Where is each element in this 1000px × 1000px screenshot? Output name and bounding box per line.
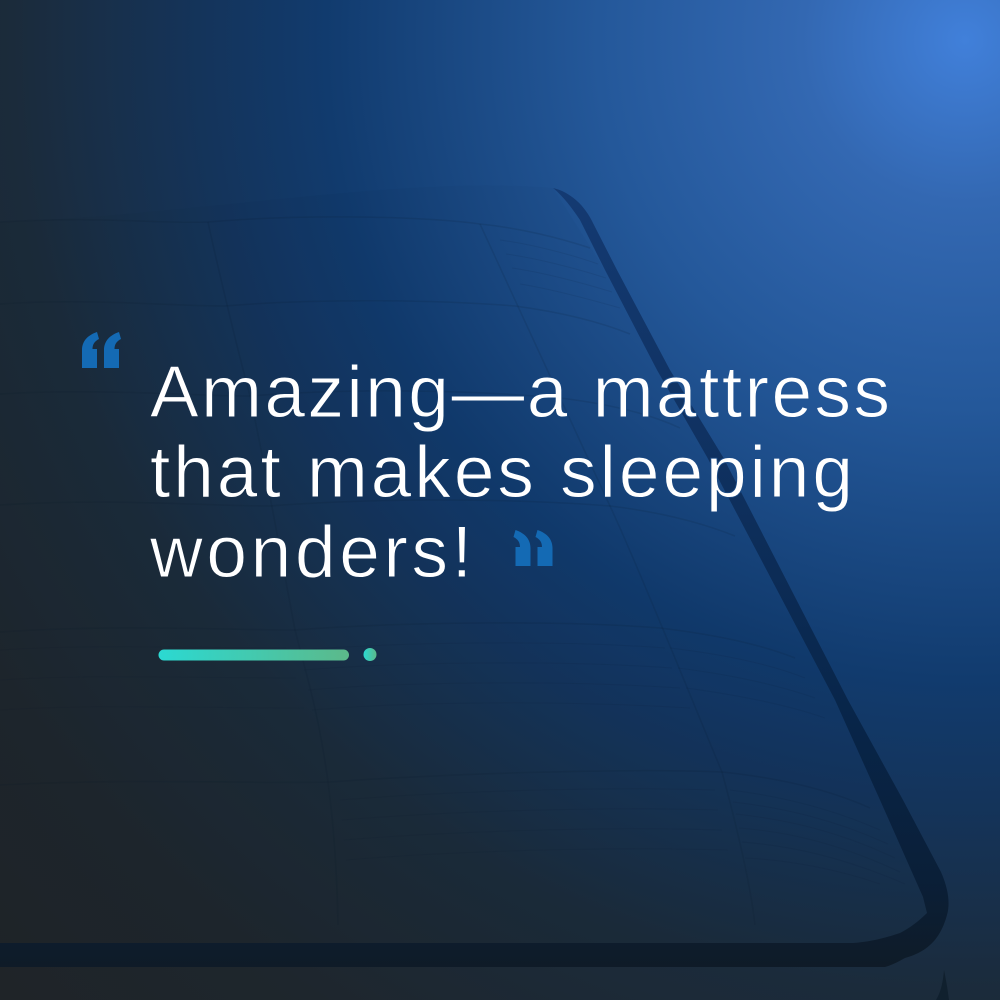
mattress tuft seams <box>0 217 870 925</box>
accent dot <box>364 648 376 661</box>
icon: opening quotation mark <box>82 332 121 368</box>
mattress base corner <box>936 970 949 1000</box>
quote line 2: that makes sleeping <box>150 432 853 513</box>
quote line 1: Amazing—a mattress <box>150 352 890 433</box>
icon: closing quotation mark <box>514 530 552 566</box>
quote line 3: wonders! <box>149 512 472 593</box>
mattress illustration <box>0 185 949 1000</box>
mattress piping edge <box>0 188 949 967</box>
mattress top surface <box>0 185 927 945</box>
quote text <box>149 352 890 593</box>
mattress quilting ribs <box>0 240 905 884</box>
accent bar <box>158 650 349 660</box>
